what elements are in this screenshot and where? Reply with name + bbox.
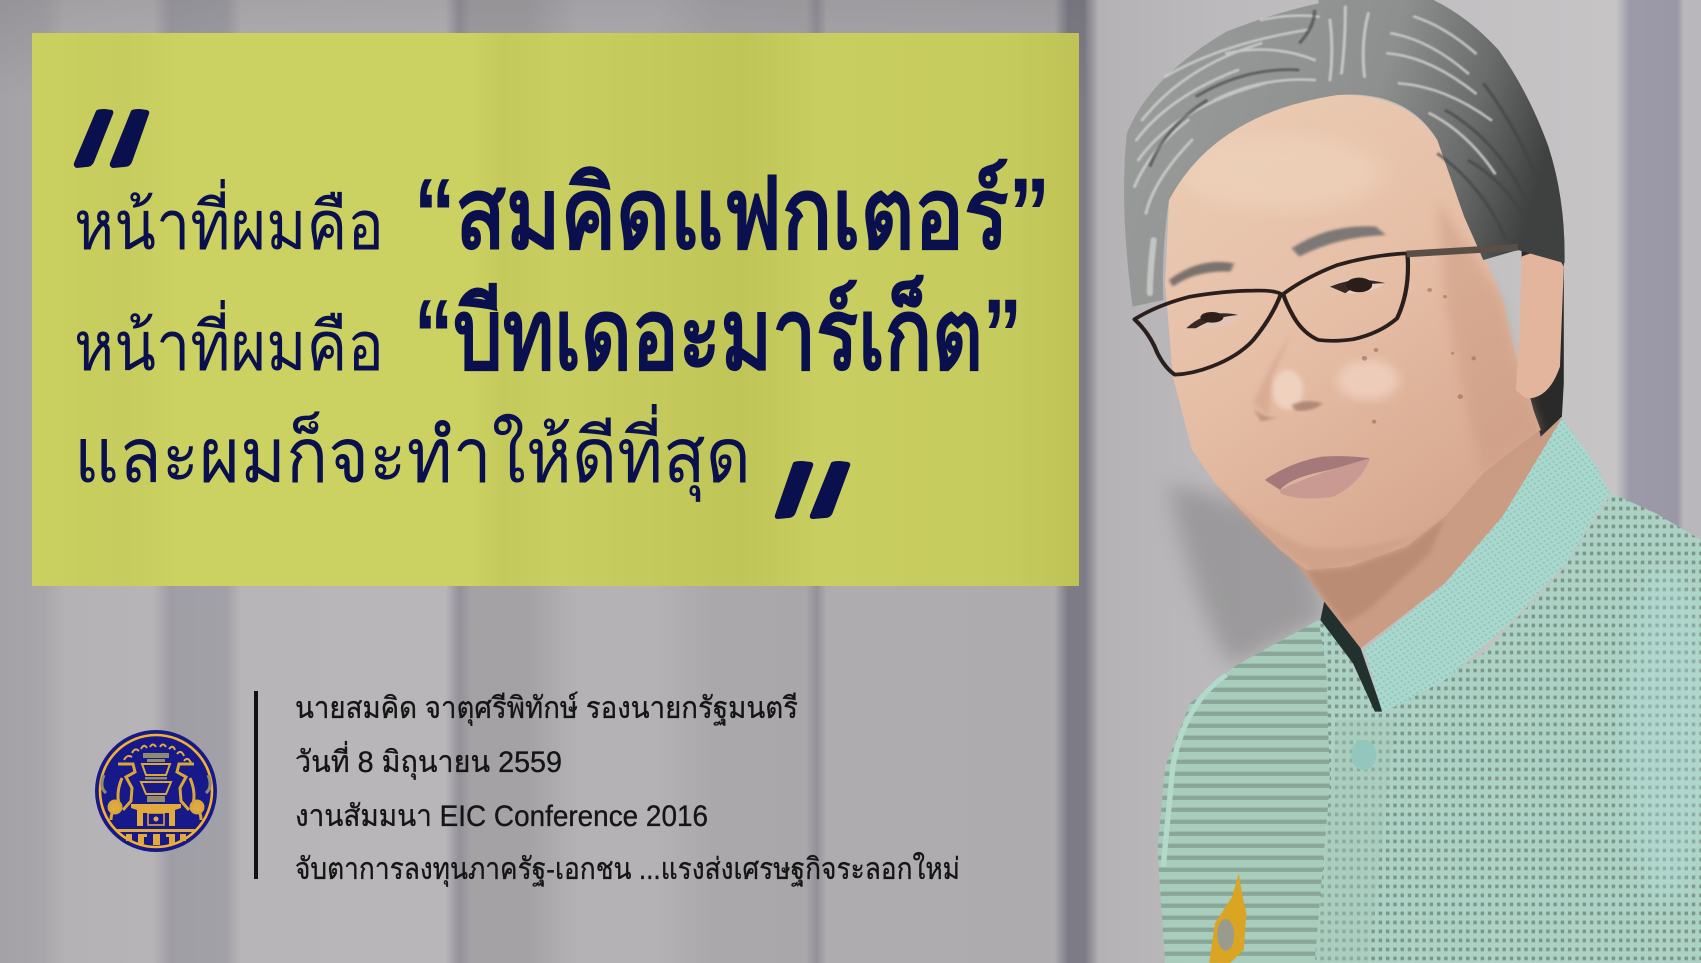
seal: flame crown <box>124 744 191 763</box>
neck <box>1272 418 1562 648</box>
neck under-chin shadow <box>1307 518 1445 623</box>
front placket band <box>1315 720 1395 963</box>
seal: base <box>116 829 196 845</box>
hair behind ear <box>1522 250 1564 437</box>
topic line: จับตาการลงทุนภาครัฐ-เอกชน ...แรงส่งเศรษฐกิจระลอกใหม่ <box>295 852 960 888</box>
eye left <box>1186 312 1240 328</box>
quote line 2 emphasis: “บีทเดอะมาร์เก็ต” <box>414 274 1022 391</box>
forehead highlight <box>1184 137 1384 210</box>
temple and cheek shading <box>1437 200 1541 473</box>
gold brooch <box>1209 873 1246 963</box>
shirt button <box>1351 740 1376 770</box>
icon: closing quote mark <box>775 461 850 519</box>
face <box>1165 95 1541 570</box>
nose side shadow <box>1253 333 1292 417</box>
mouth <box>1265 456 1370 498</box>
dark inner placket <box>1320 602 1382 712</box>
icon: opening quote mark <box>74 109 149 168</box>
nose <box>1253 370 1322 422</box>
shirt body <box>1157 493 1701 963</box>
eye right <box>1330 278 1386 294</box>
eyebrow left <box>1169 262 1234 287</box>
right shirt light area <box>1625 567 1701 900</box>
seal: central pedestal urn <box>131 753 181 826</box>
seal: left guardian lion <box>102 764 135 820</box>
shoulder seam <box>1163 675 1226 867</box>
speaker line: นายสมคิด จาตุศรีพิทักษ์ รองนายกรัฐมนตรี <box>295 691 798 727</box>
hair streaks <box>1134 7 1495 293</box>
facial spots <box>1362 288 1476 424</box>
dark hair strands <box>1150 10 1545 247</box>
quote line 2 lead: หน้าที่ผมคือ <box>74 300 384 385</box>
divider bar <box>254 691 258 879</box>
left sleeve stripes <box>1157 620 1330 963</box>
photo: man in light green Thai shirt <box>1124 0 1701 963</box>
collar <box>1364 418 1610 713</box>
text block: event details <box>295 691 960 888</box>
quote line 1 emphasis: “สมคิดแฟกเตอร์” <box>414 158 1050 270</box>
cheek highlight <box>1338 360 1399 400</box>
event line: งานสัมมนา EIC Conference 2016 <box>295 800 708 833</box>
jaw and chin shading <box>1215 483 1430 570</box>
quote line 1 lead: หน้าที่ผมคือ <box>74 179 384 264</box>
eyebrow right <box>1292 226 1386 257</box>
hair <box>1124 0 1565 307</box>
panel: quote <box>32 33 1079 586</box>
soft shadow behind neck <box>1169 483 1326 667</box>
ear <box>1516 252 1564 398</box>
glasses <box>1134 247 1518 375</box>
seal: right guardian lion <box>177 764 210 820</box>
icon: government seal <box>95 730 217 852</box>
quote line 3: และผมก็จะทำให้ดีที่สุด <box>74 404 751 502</box>
date line: วันที่ 8 มิถุนายน 2559 <box>295 741 562 781</box>
